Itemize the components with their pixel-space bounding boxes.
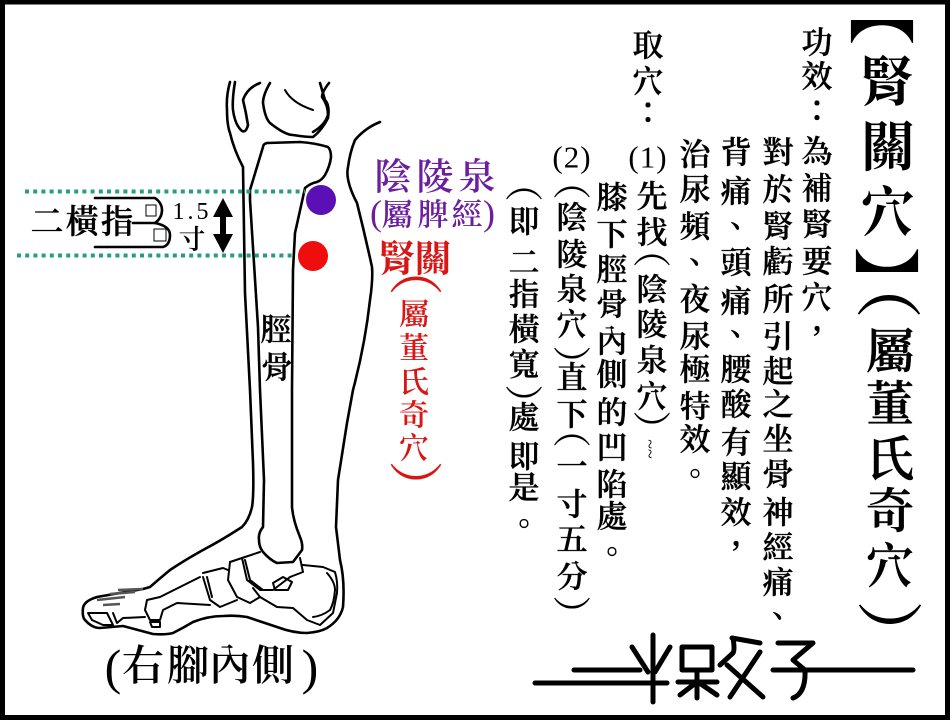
caption: right foot inner side: 右腳內側: [122, 643, 294, 690]
caption: right foot inner side: ): [302, 639, 318, 695]
arrow: double-headed: [213, 198, 233, 253]
foot bones: [88, 552, 337, 627]
opening bracket: ︵: [389, 241, 443, 301]
femur and patella: [233, 82, 329, 137]
panel: leg illustration: [83, 82, 380, 634]
category: 屬董氏奇穴: [399, 298, 429, 466]
point: Yinlingquan purple dot: [306, 185, 336, 215]
heading: 取穴：: [632, 28, 664, 130]
label: tibia: 脛骨: [260, 312, 292, 386]
text: 二橫指: 二橫指: [30, 204, 134, 241]
text: 1.5 寸: 寸: [178, 225, 206, 255]
subtitle text: 屬董氏奇穴: [866, 326, 914, 594]
parentheses: (): [370, 193, 495, 233]
column 2: 對於腎虧所引起之坐骨神經痛、: [762, 136, 794, 634]
step 1 continuation: 膝下脛骨內側的凹陷處。: [596, 180, 628, 570]
text: 1.5 寸: [172, 199, 212, 255]
label: Shenguan: [378, 238, 452, 520]
step 1 column: [633, 180, 671, 459]
step 2 continuation: ︵: [505, 164, 543, 206]
step 2 column: ︶: [553, 346, 591, 388]
text block: point location: [505, 28, 671, 638]
text: 1.5 寸: 1.5: [172, 199, 212, 225]
title: [849, 0, 920, 320]
step 1 marker: (1): [628, 140, 668, 174]
point: Shenguan red dot: [298, 241, 328, 271]
step 2 continuation: ︶: [505, 385, 543, 427]
name: 陰陵泉: [374, 156, 496, 198]
step 2 column: 陰陵泉穴直下一寸五分: [556, 200, 588, 594]
signature logo: [535, 635, 913, 702]
name: 腎關: [378, 238, 452, 280]
title text: 腎關穴: [860, 53, 915, 243]
column 3: 背痛、頭痛、腰酸有顯效，: [720, 136, 752, 566]
step 1 column: ︵: [633, 230, 671, 272]
step 2 marker: (2): [552, 140, 592, 174]
step 1 column: 先找陰陵泉穴: [636, 180, 668, 414]
step 1 column: ︶: [633, 411, 671, 453]
caption: right foot inner side: [105, 639, 318, 695]
label: Yinlingquan: [370, 156, 496, 233]
dotted guide line: lower: [17, 254, 295, 258]
step 1 column: ~~: [640, 439, 660, 459]
label: two finger widths: [30, 198, 233, 255]
caption: right foot inner side: (: [105, 639, 121, 695]
closing bracket: ︼: [854, 248, 920, 320]
column 4: 治尿頻、夜尿極特效。: [680, 138, 712, 492]
step 2 continuation: 即二指橫寬處即是。: [508, 204, 540, 542]
icon: two fingers: [95, 198, 170, 247]
step 2 column: ︶: [553, 596, 591, 638]
closing bracket: ︶: [389, 460, 443, 520]
text block: efficacy: [680, 26, 834, 634]
tibia bone: [250, 142, 331, 563]
opening bracket: ︵: [856, 252, 922, 326]
step 2 column: ︵: [553, 410, 591, 452]
step 2 column: ︵: [553, 162, 591, 204]
heading: 功效：: [802, 26, 832, 128]
closing bracket: ︶: [857, 600, 923, 674]
leg outline: [83, 82, 380, 634]
meridian: 屬脾經: [382, 198, 482, 232]
subtitle: [856, 252, 923, 674]
dotted guide line: upper: [25, 190, 305, 194]
column 1: 為補腎要穴，: [802, 134, 834, 350]
step 2 column: [553, 162, 591, 638]
